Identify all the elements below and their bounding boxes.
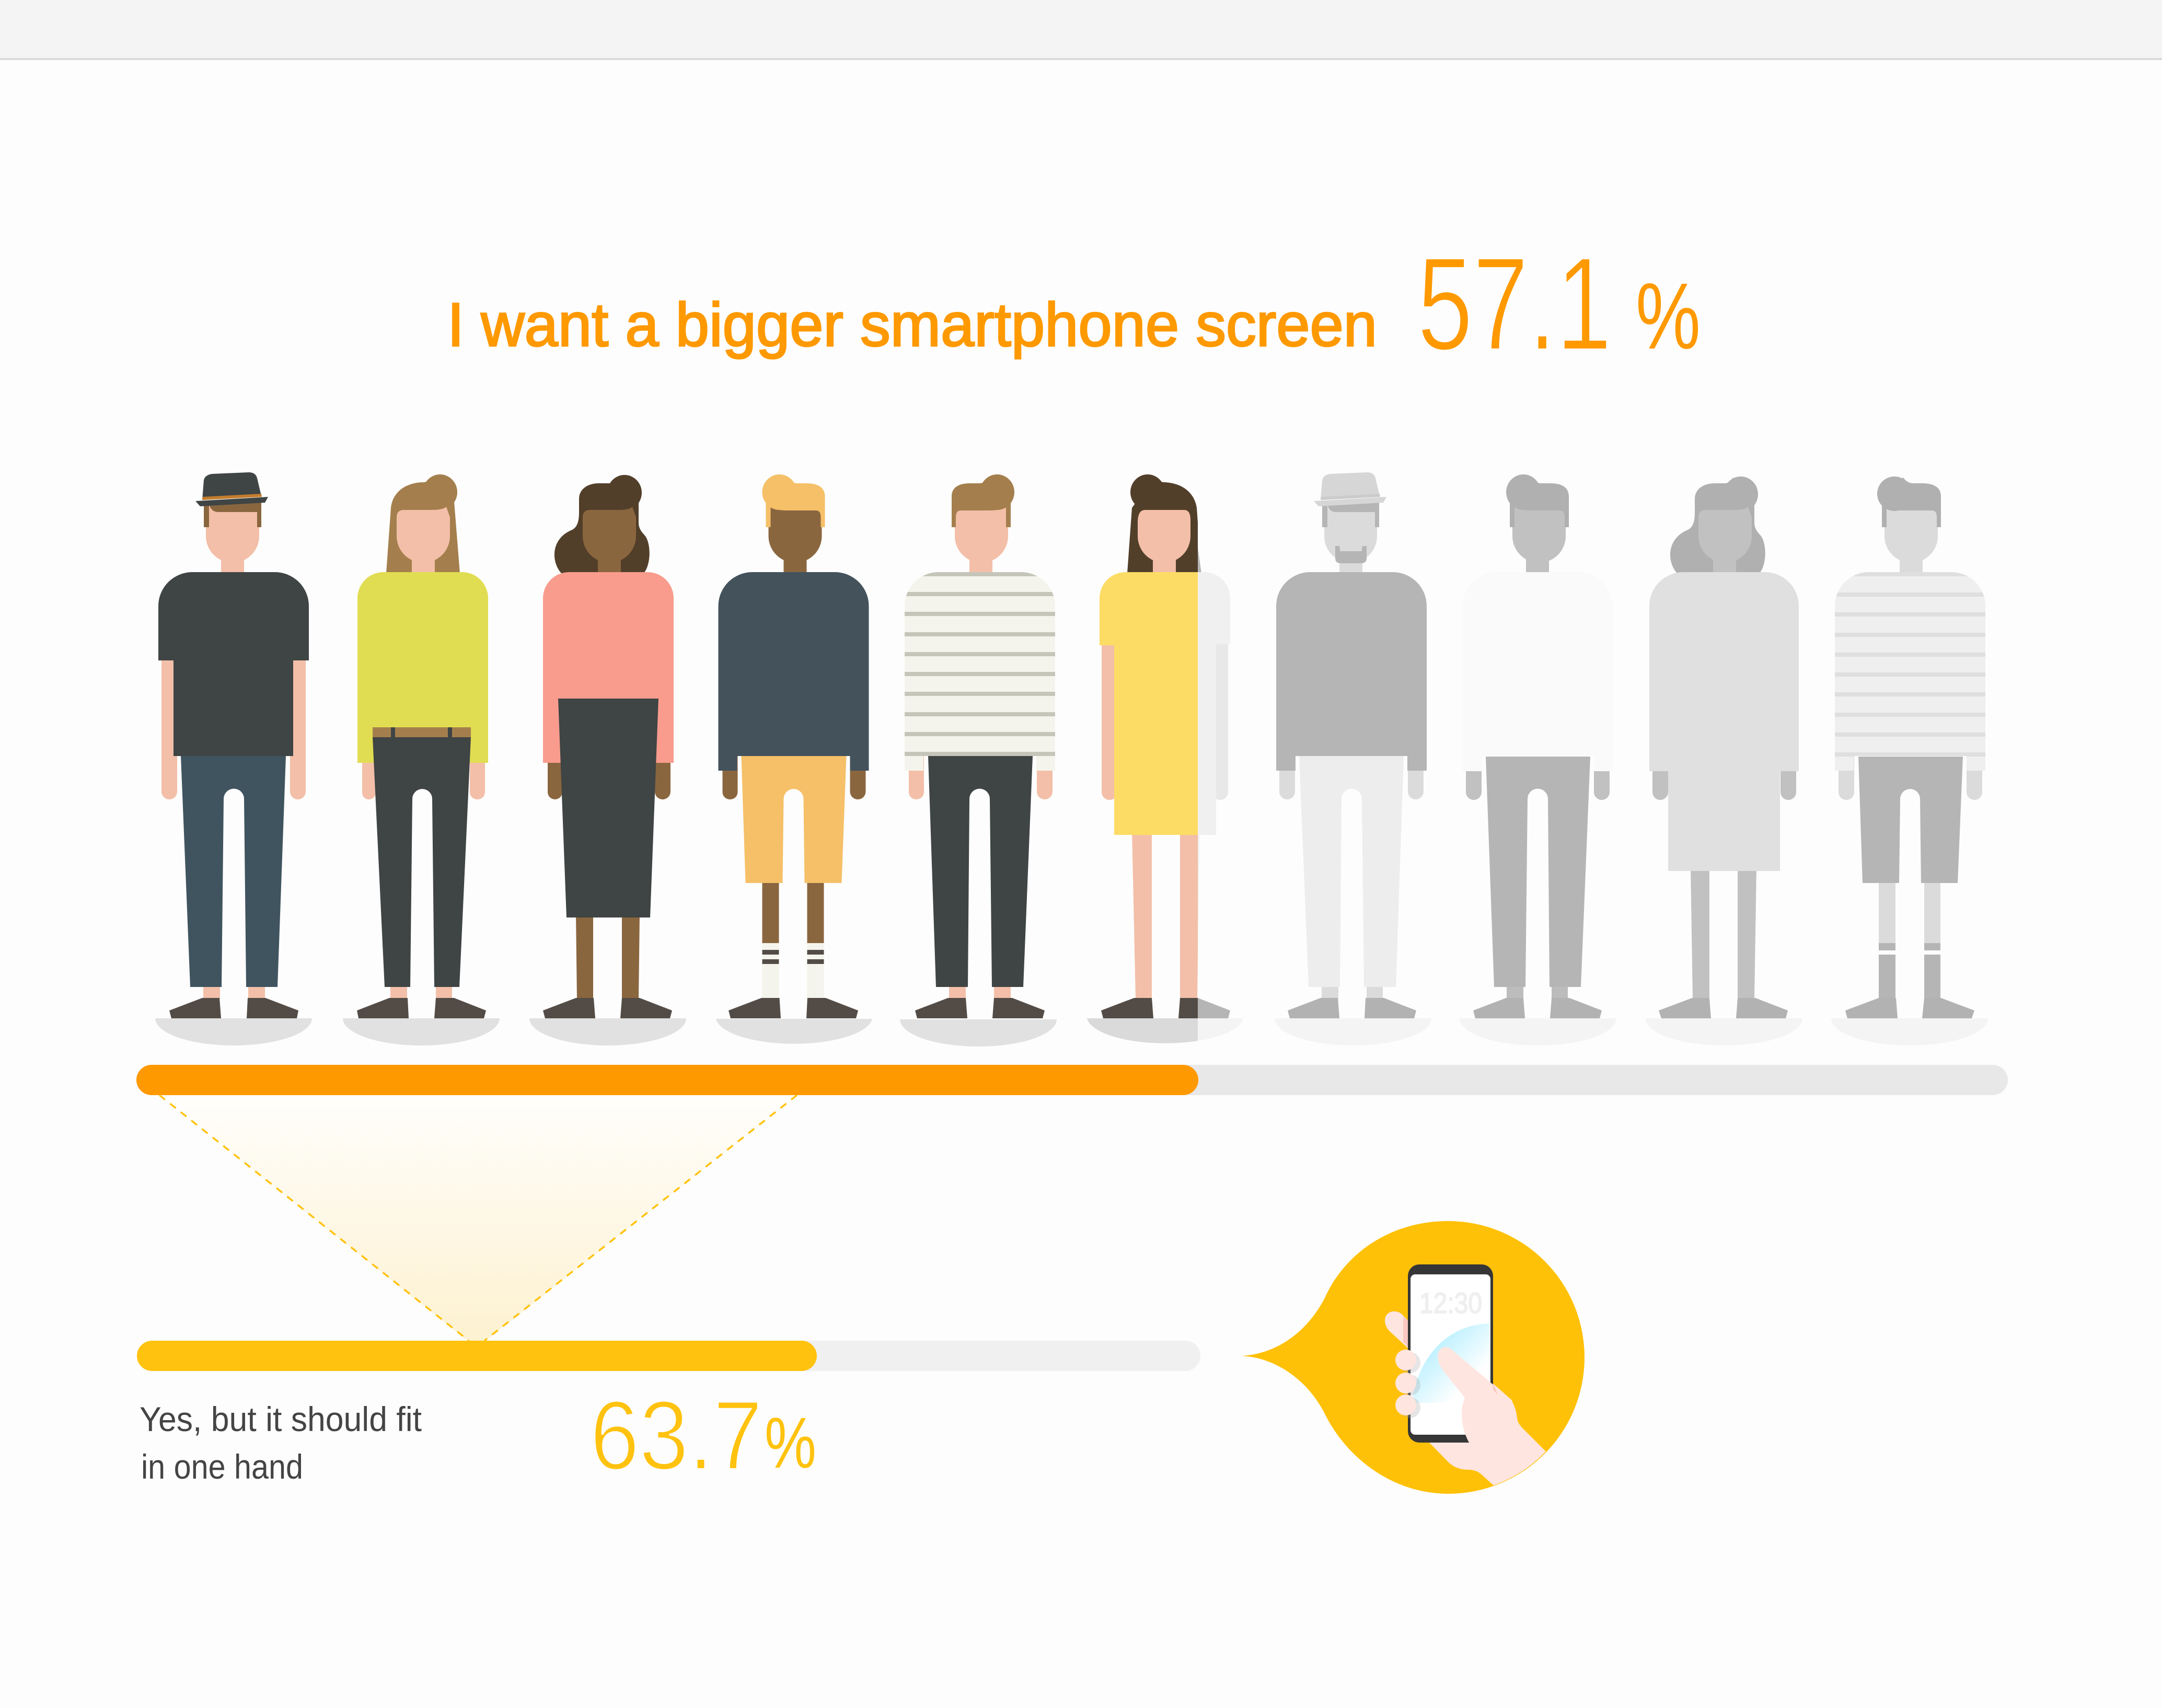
fingers bbox=[1395, 1350, 1416, 1415]
finger shadows bbox=[1400, 1352, 1420, 1418]
progress bar: 63.7 percent bbox=[137, 1341, 1200, 1371]
wallpaper arc bbox=[1412, 1323, 1489, 1403]
person 5: striped sweater, dark trousers bbox=[900, 474, 1058, 1047]
person 2: long hair, yellow sweater, belt bbox=[343, 474, 500, 1045]
title bbox=[447, 229, 1701, 378]
person 10: greyed striped sweater, shorts, socks bbox=[1831, 477, 1988, 1045]
caption: Yes, but it should fit bbox=[140, 1400, 422, 1438]
index finger and palm bbox=[1438, 1347, 1517, 1458]
phone bbox=[1408, 1264, 1517, 1458]
back of hand bbox=[1429, 1384, 1546, 1485]
caption bbox=[140, 1400, 422, 1486]
person 3: curly hair, pink sweater, dark skirt bbox=[529, 475, 686, 1045]
phone clock: 12:30 bbox=[1419, 1286, 1482, 1319]
person 1: hat, dark tee, blue jeans bbox=[155, 472, 312, 1045]
person 6: half coloured, half grey, yellow dress bbox=[1087, 474, 1243, 1043]
speech bubble with hand and phone icon bbox=[1241, 1221, 1585, 1494]
people row bbox=[155, 472, 1988, 1047]
percentage: 63.7: % bbox=[765, 1403, 816, 1483]
thumb behind phone bbox=[1385, 1311, 1409, 1349]
bubble bbox=[1241, 1221, 1585, 1494]
person 4: blonde hair, navy sweater, shorts, socks bbox=[716, 474, 872, 1044]
person 8: greyed white sweater, grey trousers bbox=[1460, 474, 1616, 1045]
top band bbox=[0, 0, 2162, 60]
percentage: 63.7: 63.7 bbox=[590, 1380, 762, 1490]
title percentage: 57.1 bbox=[1417, 229, 1612, 378]
title percentage: % bbox=[1636, 264, 1701, 369]
progress bar: 57.1 percent bbox=[136, 1065, 2008, 1095]
person 9: greyed curly hair, long dress bbox=[1646, 477, 1802, 1045]
person 7: greyed hat, beard, grey sweater bbox=[1275, 472, 1431, 1045]
connector funnel between bars bbox=[159, 1095, 797, 1348]
caption: in one hand bbox=[141, 1447, 303, 1486]
title text: I want a bigger smartphone screen bbox=[447, 291, 1377, 359]
